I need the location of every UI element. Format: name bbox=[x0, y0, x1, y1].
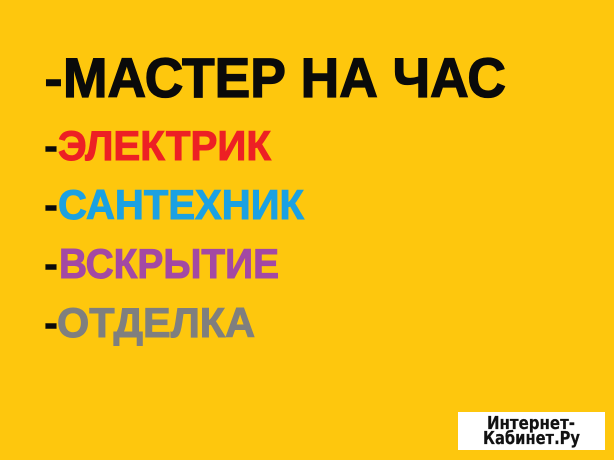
list item: plumber: - bbox=[44, 181, 58, 228]
list item: finishing: ОТДЕЛКА bbox=[57, 299, 255, 346]
list item: plumber: САНТЕХНИК bbox=[58, 181, 304, 228]
title: - bbox=[44, 47, 63, 109]
watermark badge bbox=[458, 412, 605, 450]
list item: electrician: ЭЛЕКТРИК bbox=[58, 122, 271, 169]
title: МАСТЕР НА ЧАС bbox=[63, 47, 506, 109]
watermark badge: Кабинет.Ру bbox=[483, 429, 580, 449]
list item: electrician: - bbox=[44, 122, 58, 169]
watermark badge: Интернет- bbox=[487, 414, 575, 434]
list item: lock opening: - bbox=[44, 240, 58, 287]
list item: finishing: - bbox=[44, 299, 58, 346]
list item: lock opening: ВСКРЫТИЕ bbox=[59, 240, 279, 287]
